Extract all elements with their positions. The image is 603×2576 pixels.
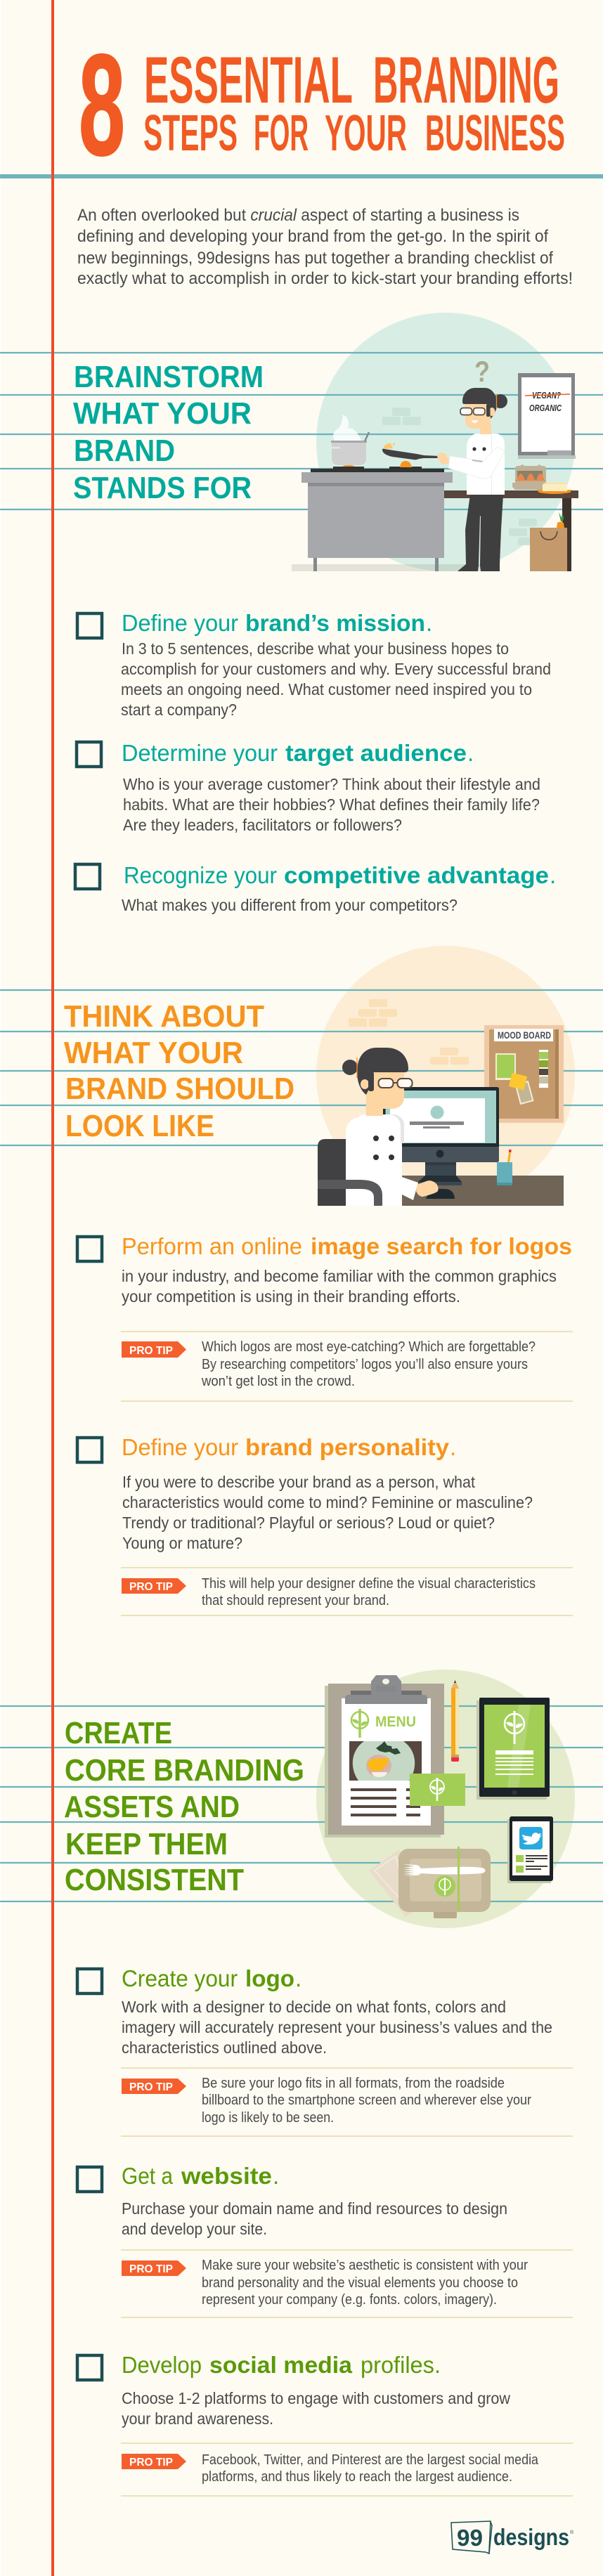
pro tip: PRO TIP [129, 2081, 173, 2093]
frying pan [382, 442, 439, 460]
item: social media: Develop [122, 2352, 202, 2378]
item: brand mission: . [426, 610, 432, 636]
item: image search: in your industry, and become familiar with the common graphics [122, 1267, 557, 1285]
clipboard menu [325, 1675, 444, 1837]
item: logo: characteristics outlined above. [122, 2038, 327, 2057]
takeout box and fork [369, 1847, 491, 1918]
intro text: exactly what to accomplish in order to kick-start your branding efforts! [77, 269, 573, 288]
monitor [383, 1087, 499, 1185]
whiteboard: ORGANIC [529, 403, 562, 413]
item: logo: logo [245, 1965, 294, 1991]
illustration: chef cooking [292, 355, 578, 571]
logo: 99designs: designs [493, 2524, 569, 2550]
item: social media: Choose 1-2 platforms to engage with customers and grow [122, 2389, 510, 2407]
item: target audience [77, 740, 540, 834]
item: target audience: . [467, 740, 474, 766]
item: brand personality: Define your [122, 1434, 238, 1460]
bricks [349, 999, 469, 1065]
checklist: brainstorm [75, 610, 556, 914]
designer [318, 1048, 439, 1206]
pro tip: By researching competitors’ logos you’ll also ensure yours [202, 1357, 528, 1372]
menu logo [351, 1709, 368, 1738]
pro tip: logo is likely to be seen. [202, 2110, 334, 2126]
item: logo: Work with a designer to decide on what fonts, colors and [122, 1998, 506, 2016]
pro tip: PRO TIP [129, 1345, 173, 1357]
egg carton [512, 464, 547, 490]
icon: twitter bird [519, 1827, 543, 1849]
item: competitive advantage: competitive advantage [284, 862, 549, 888]
item: brand personality: Trendy or traditional? Playful or serious? Loud or quiet? [122, 1514, 495, 1532]
item: image search: your competition is using in their branding efforts. [122, 1287, 460, 1306]
bricks [382, 408, 537, 545]
item: competitive advantage [75, 862, 556, 914]
pro tip [122, 2258, 528, 2308]
item: website: . [273, 2163, 279, 2189]
item: brand mission: Define your [122, 610, 238, 636]
pro tip [122, 2076, 531, 2126]
logo: 99designs: ® [570, 2530, 574, 2535]
heading: create: CREATE [65, 1716, 172, 1750]
item: logo: . [295, 1965, 302, 1991]
pot and steam [331, 415, 369, 465]
pro tip: Be sure your logo fits in all formats, from the roadside [202, 2076, 505, 2091]
clipboard menu: MENU [375, 1714, 416, 1730]
heading: think about: LOOK LIKE [65, 1109, 214, 1143]
pro tip [122, 2452, 539, 2485]
intro text: new beginnings, 99designs has put together a branding checklist of [77, 249, 553, 268]
pro tip: platforms, and thus likely to reach the largest audience. [202, 2469, 512, 2485]
heading: create: ASSETS AND [64, 1790, 240, 1824]
item: competitive advantage: Recognize your [124, 862, 277, 888]
table and groceries [444, 464, 578, 571]
illustration: designer at computer [318, 999, 564, 1206]
item: brand mission: start a company? [121, 701, 237, 719]
panel: brainstorm illustration background [316, 313, 575, 571]
title line two [143, 105, 565, 162]
item: target audience: Are they leaders, facilitators or followers? [123, 816, 402, 834]
pro tip: won’t get lost in the crowd. [201, 1374, 355, 1389]
mood board [484, 1025, 564, 1123]
heading: brainstorm: BRAND [74, 434, 175, 468]
item: brand mission [77, 610, 551, 719]
pro tip: This will help your designer define the visual characteristics [202, 1576, 536, 1592]
item: brand mission: accomplish for your customers and why. Every successful brand [121, 660, 551, 678]
item: logo: imagery will accurately represent your business’s values and the [122, 2018, 552, 2036]
item: brand mission: brand’s mission [245, 610, 425, 636]
carrot [559, 512, 565, 521]
item: website: website [181, 2163, 272, 2189]
numeral 8: 8 [79, 25, 125, 186]
item: target audience: target audience [285, 740, 467, 766]
pro tip: Facebook, Twitter, and Pinterest are the largest social media [202, 2452, 539, 2468]
logo: 99designs: 99 [457, 2525, 483, 2551]
food photo [349, 1741, 422, 1781]
mouse [426, 1189, 455, 1199]
item: target audience: Determine your [122, 740, 278, 766]
item: image search: Perform an online [122, 1233, 302, 1259]
item: social media [77, 2352, 573, 2496]
pro tip: PRO TIP [129, 1581, 173, 1593]
heading: brainstorm [73, 360, 264, 505]
pro tip: billboard to the smartphone screen and wherever else your [202, 2093, 531, 2108]
heading: brainstorm: WHAT YOUR [73, 396, 252, 431]
item: brand personality: Young or mature? [122, 1534, 242, 1552]
item: brand personality [77, 1434, 573, 1615]
heading: create: CONSISTENT [65, 1863, 244, 1897]
heading: brainstorm: STANDS FOR [73, 471, 252, 505]
title [79, 25, 565, 186]
item: website [77, 2163, 573, 2317]
heading: think about [64, 999, 294, 1143]
business card [410, 1774, 465, 1806]
icon: question mark: ? [474, 355, 490, 388]
heading: create: KEEP THEM [65, 1827, 228, 1861]
pro tip: represent your company (e.g. fonts. colors, imagery). [202, 2292, 497, 2308]
item: brand mission: meets an ongoing need. What customer need inspired you to [121, 680, 532, 698]
item: website: and develop your site. [122, 2220, 267, 2238]
logo: 99designs [451, 2521, 574, 2554]
item: brand mission: In 3 to 5 sentences, describe what your business hopes to [122, 639, 509, 658]
item: website: Purchase your domain name and find resources to design [122, 2199, 507, 2218]
pro tip: PRO TIP [129, 2263, 173, 2275]
item: website: Get a [122, 2163, 174, 2189]
paper bag [530, 528, 567, 571]
item: logo: Create your [122, 1965, 238, 1991]
heading: think about: BRAND SHOULD [65, 1072, 294, 1106]
title line one: ESSENTIAL [144, 43, 353, 117]
item: image search [77, 1233, 573, 1401]
intro text: An often overlooked but crucial aspect of starting a business is [77, 206, 519, 225]
stove [302, 461, 453, 571]
desk [402, 1176, 564, 1206]
pro tip [122, 1339, 536, 1389]
pencil [451, 1680, 459, 1762]
heading: create: CORE BRANDING [65, 1753, 304, 1788]
board words: VEGAN? [532, 391, 561, 401]
pro tip: that should represent your brand. [202, 1593, 389, 1608]
item: target audience: habits. What are their hobbies? What defines their family life? [123, 795, 540, 814]
item: brand personality: brand personality [245, 1434, 450, 1460]
tablet [476, 1698, 550, 1800]
title line two: YOUR [325, 105, 407, 162]
intro text [77, 206, 573, 288]
whiteboard [518, 373, 576, 459]
checklist: assets [77, 1965, 573, 2496]
item: brand personality: . [450, 1434, 456, 1460]
item: target audience: Who is your average customer? Think about their lifestyle and [123, 775, 540, 793]
item: social media: profiles. [361, 2352, 441, 2378]
pro tip: brand personality and the visual elements you choose to [202, 2275, 518, 2291]
plate and butter [537, 490, 572, 494]
mood board: MOOD BOARD [498, 1030, 551, 1041]
item: logo [77, 1965, 573, 2136]
heading: create [64, 1716, 304, 1897]
title line two: FOR [254, 105, 309, 162]
checklist: look [77, 1233, 573, 1615]
item: competitive advantage: . [550, 862, 556, 888]
item: image search: image search for logos [311, 1233, 572, 1259]
heading: think about: THINK ABOUT [64, 999, 264, 1034]
panel: look illustration background [316, 946, 575, 1204]
phone [507, 1816, 553, 1883]
pro tip: PRO TIP [129, 2457, 173, 2468]
heading: brainstorm: BRAINSTORM [74, 360, 264, 394]
pencil cup [497, 1150, 512, 1185]
title line two: STEPS [143, 105, 238, 162]
item: competitive advantage: What makes you different from your competitors? [122, 896, 458, 914]
item: social media: your brand awareness. [122, 2409, 273, 2428]
pro tip: Which logos are most eye-catching? Which are forgettable? [202, 1339, 536, 1355]
item: brand personality: If you were to describe your brand as a person, what [122, 1473, 476, 1491]
item: social media: social media [209, 2352, 353, 2378]
chef [437, 388, 507, 571]
pro tip [122, 1576, 536, 1608]
margin line [51, 0, 54, 2576]
heading: think about: WHAT YOUR [64, 1036, 243, 1070]
intro text: defining and developing your brand from the get-go. In the spirit of [77, 227, 548, 246]
pro tip: Make sure your website’s aesthetic is consistent with your [202, 2258, 528, 2273]
illustration: branding assets [325, 1675, 553, 1918]
panel: assets illustration background [316, 1670, 575, 1928]
item: brand personality: characteristics would come to mind? Feminine or masculine? [122, 1493, 533, 1511]
